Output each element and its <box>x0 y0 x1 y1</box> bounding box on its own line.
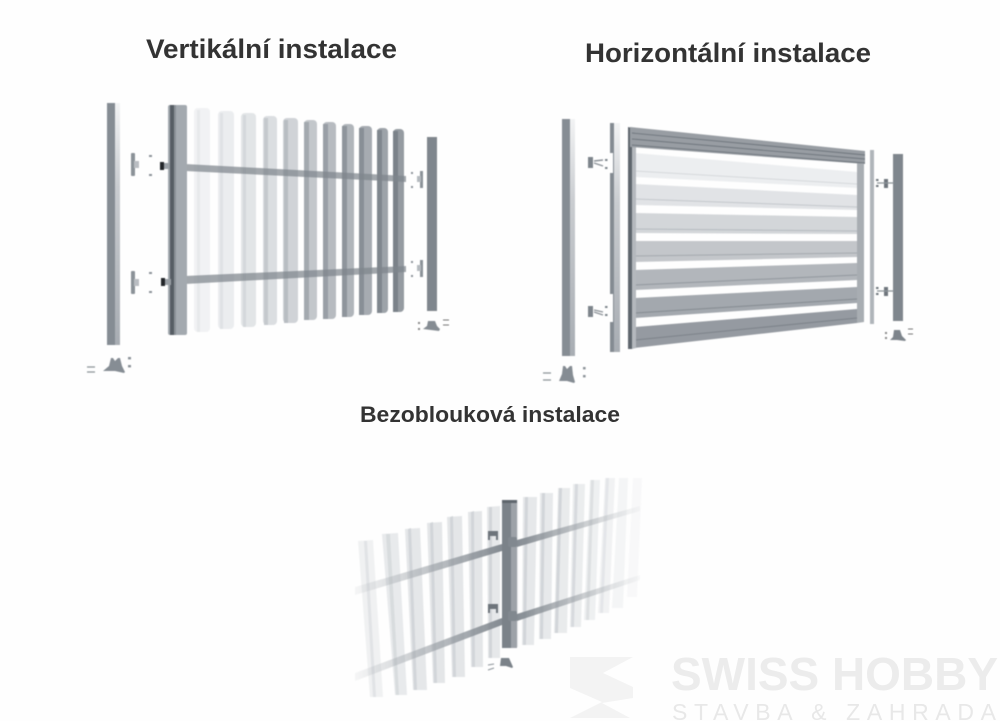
pickets <box>194 108 404 332</box>
left base plate <box>543 366 586 383</box>
main frame post <box>168 105 187 335</box>
right base plate <box>418 320 449 331</box>
right brackets <box>876 179 894 296</box>
right post <box>893 154 903 321</box>
title: weldless installation: Bezoblouková instalace <box>360 402 620 427</box>
diagram: horizontal fence <box>543 119 913 383</box>
left base plate <box>87 357 131 373</box>
pickets <box>358 478 642 697</box>
picket shading <box>364 478 609 697</box>
diagram: vertical fence <box>87 103 449 373</box>
watermark: logo mark <box>570 657 633 718</box>
diagram: weldless fence <box>355 478 642 697</box>
title: horizontal installation: Horizontální instalace <box>585 38 871 68</box>
clamps <box>488 531 517 621</box>
right brackets <box>411 171 423 277</box>
left top bracket <box>131 153 152 176</box>
base plate <box>488 658 513 670</box>
slats <box>634 153 857 348</box>
rails <box>355 506 640 681</box>
right base plate <box>885 329 913 341</box>
left brackets <box>588 157 608 317</box>
title: vertical installation: Vertikální instalace <box>146 34 397 64</box>
top rail <box>630 127 865 164</box>
central post <box>502 500 517 648</box>
frame sides <box>628 127 864 349</box>
left post <box>562 119 575 356</box>
black clips <box>160 162 165 286</box>
thin right strip <box>870 150 874 324</box>
left bottom bracket <box>131 271 152 294</box>
second post <box>610 123 620 352</box>
left post <box>107 103 120 345</box>
horizontal rails <box>185 164 406 284</box>
right post <box>427 137 437 311</box>
watermark: brand name: SWISS HOBBY <box>671 648 998 700</box>
clip plates <box>164 163 171 285</box>
